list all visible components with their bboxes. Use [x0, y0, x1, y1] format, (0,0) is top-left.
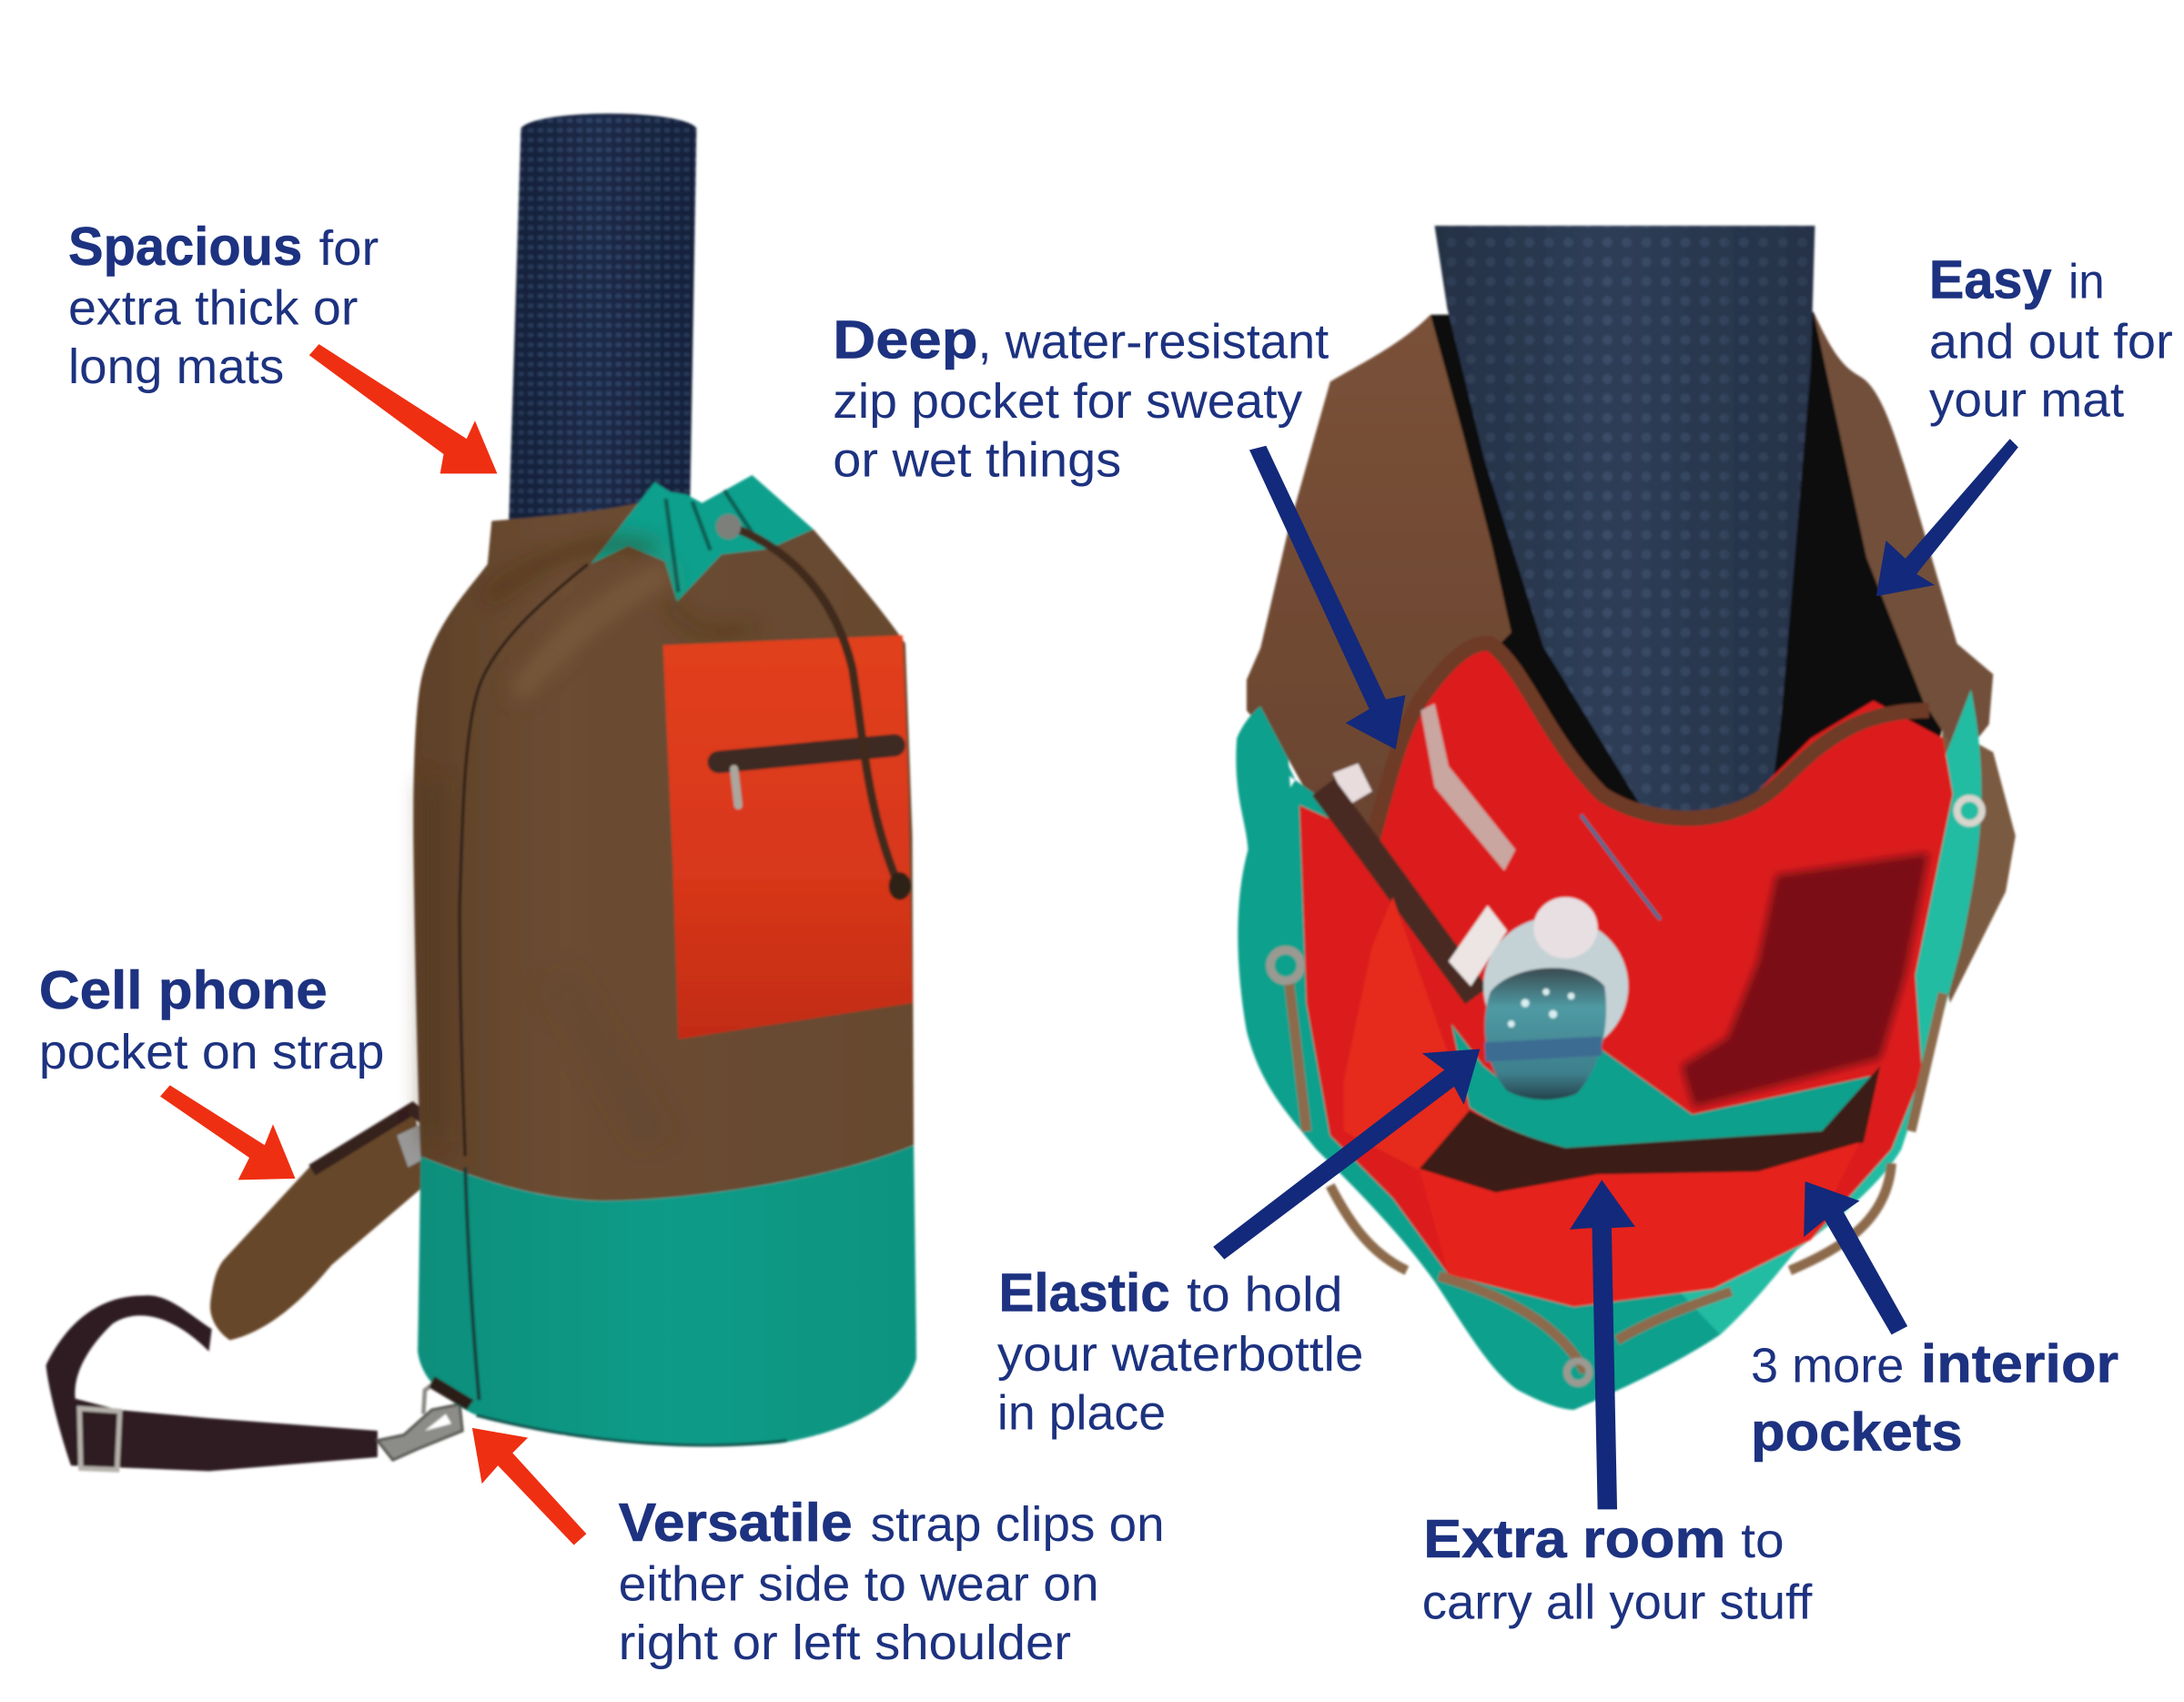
text: deep: , water-resistant — [977, 315, 1329, 369]
back brown side — [1929, 724, 2016, 1003]
text: elastic — [997, 1261, 1363, 1440]
arrow: easy — [1876, 439, 2018, 596]
yoga mat rolled — [509, 114, 696, 536]
text: easy: in — [2068, 256, 2105, 309]
cloth folds — [431, 544, 753, 1142]
text: interior pockets: interior — [1921, 1332, 2118, 1393]
text: elastic: your waterbottle — [997, 1328, 1363, 1382]
text: versatile: Versatile — [619, 1492, 853, 1553]
blue thread — [1581, 815, 1660, 919]
drawcord with toggle — [716, 514, 911, 900]
right brown flap — [1814, 312, 1993, 759]
pocket zipper — [719, 745, 895, 805]
diagonal brown strap — [1323, 787, 1476, 996]
text: extra room: Extra room — [1423, 1508, 1725, 1569]
text: spacious: for — [319, 222, 379, 276]
text: cell phone — [39, 959, 384, 1079]
bright left pocket — [1344, 897, 1470, 1170]
teal floor — [1451, 1024, 1874, 1148]
phone pocket on strap — [210, 1114, 426, 1340]
teal gathered top — [591, 475, 814, 602]
teal bag base — [418, 1145, 916, 1446]
text: deep: or wet things — [833, 433, 1121, 487]
side seam — [460, 564, 588, 1156]
arrow: spacious — [309, 344, 497, 473]
dark red shadow — [1681, 853, 1929, 1108]
text: cell phone: Cell phone — [39, 959, 328, 1020]
teal outer lining — [1237, 690, 1981, 1410]
text: deep: zip pocket for sweaty — [833, 375, 1302, 429]
text: spacious: extra thick or — [68, 282, 358, 336]
brown bag body — [413, 503, 914, 1201]
tag — [1449, 906, 1507, 987]
arrow: elastic — [1213, 1049, 1480, 1260]
shoulder strap — [46, 1295, 378, 1471]
text: elastic: Elastic — [998, 1261, 1170, 1322]
strap slider — [79, 1408, 120, 1470]
left bag photo — [46, 114, 916, 1471]
text: deep — [833, 309, 1329, 487]
care label — [1333, 764, 1372, 805]
text: spacious: long mats — [68, 340, 284, 394]
text: extra room: carry all your stuff — [1422, 1576, 1812, 1630]
left brown flap — [1247, 315, 1512, 836]
text: versatile: either side to wear on — [619, 1558, 1099, 1612]
pull tab — [1421, 704, 1515, 871]
text: deep: Deep — [833, 309, 977, 370]
arrow: versatile — [472, 1428, 586, 1545]
arrow: interior pockets — [1804, 1181, 1907, 1334]
text: cell phone: pocket on strap — [39, 1026, 384, 1079]
text: easy: your mat — [1929, 374, 2124, 428]
text: easy: and out for — [1929, 315, 2173, 369]
text: spacious: Spacious — [68, 216, 302, 277]
zipper around pocket — [1372, 643, 1929, 841]
arrow: cell phone — [160, 1085, 295, 1180]
water bottle — [1483, 897, 1628, 1099]
arrow: deep — [1249, 446, 1405, 749]
arrow: extra room — [1570, 1180, 1635, 1509]
red interior lining — [1299, 638, 1953, 1307]
dark brown pocket band — [1420, 1066, 1880, 1192]
text: interior pockets: pockets — [1751, 1401, 1963, 1462]
orange front pocket — [663, 635, 913, 1039]
text: interior pockets — [1751, 1332, 2118, 1462]
text: elastic: in place — [997, 1386, 1166, 1440]
text: extra room: to — [1741, 1515, 1785, 1568]
text: versatile: right or left shoulder — [619, 1616, 1071, 1670]
black interior — [1393, 312, 1943, 822]
strap clip — [378, 1376, 468, 1460]
right bag photo — [1236, 226, 2016, 1410]
text: easy — [1929, 249, 2173, 428]
drawcords and eyelets — [1270, 798, 1982, 1383]
text: versatile: strap clips on — [871, 1498, 1165, 1552]
text: easy: Easy — [1929, 249, 2052, 310]
text: extra room — [1422, 1508, 1812, 1630]
bottom red pocket — [1420, 1142, 1859, 1307]
large yoga mat — [1435, 226, 1815, 815]
text: versatile — [619, 1492, 1165, 1670]
text: spacious — [68, 216, 379, 394]
text: interior pockets: 3 more — [1751, 1339, 1904, 1393]
text: elastic: to hold — [1187, 1268, 1343, 1322]
